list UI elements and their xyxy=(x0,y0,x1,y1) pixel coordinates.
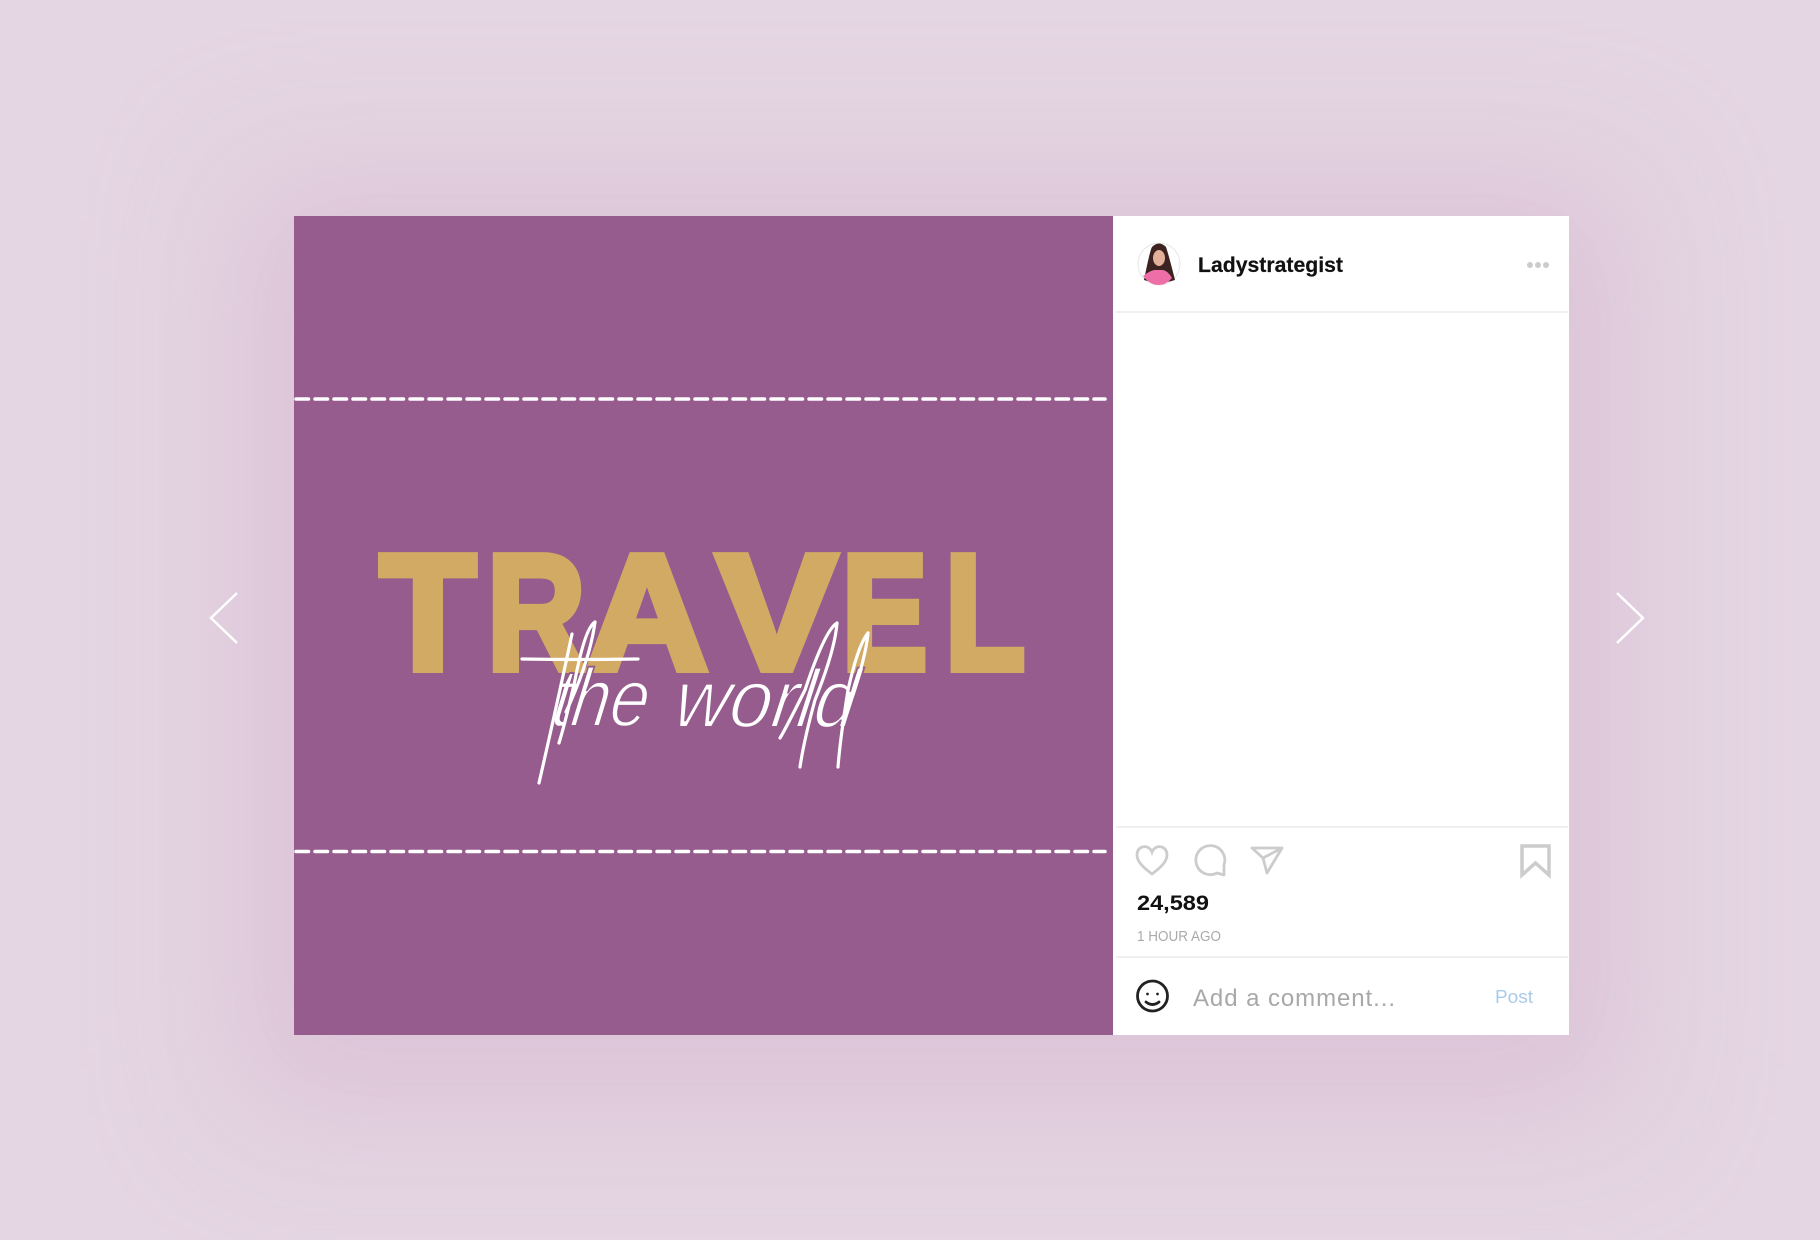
script text: the world: the xyxy=(547,652,656,744)
heading: TRAVEL xyxy=(380,521,1025,705)
heading: TRAVEL: A xyxy=(586,521,708,704)
script text: the world: world xyxy=(669,653,866,745)
icon: paper plane xyxy=(1252,848,1282,873)
post button: Post xyxy=(1495,987,1533,1007)
username: Ladystrategist xyxy=(1198,253,1343,277)
arrow: next xyxy=(1617,593,1643,643)
panel: actions xyxy=(1137,846,1549,945)
arrow: previous xyxy=(211,593,237,643)
icon: heart xyxy=(1137,847,1167,874)
icon: comment bubble xyxy=(1196,846,1225,875)
icon: avatar xyxy=(1138,243,1180,285)
panel: post card xyxy=(294,216,1569,1035)
heading: TRAVEL: T xyxy=(380,521,476,704)
dashed line top xyxy=(296,397,1105,401)
heading: TRAVEL: R xyxy=(487,521,585,704)
likes count: 24,589 xyxy=(1137,891,1209,915)
icon: more dots xyxy=(1527,262,1549,268)
panel: purple image xyxy=(294,216,1113,1035)
icon: smile xyxy=(1138,981,1168,1011)
timestamp: 1 HOUR AGO xyxy=(1137,929,1221,945)
panel: comment row xyxy=(1138,981,1533,1012)
script text: the world xyxy=(522,622,868,783)
panel: sidebar header xyxy=(1138,243,1549,285)
heading: TRAVEL: L xyxy=(945,522,1025,704)
comment placeholder: Add a comment... xyxy=(1193,985,1395,1012)
dashed line bottom xyxy=(296,850,1105,853)
heading: TRAVEL: E xyxy=(842,522,927,705)
heading: TRAVEL: V xyxy=(717,522,836,704)
icon: bookmark xyxy=(1522,846,1549,875)
